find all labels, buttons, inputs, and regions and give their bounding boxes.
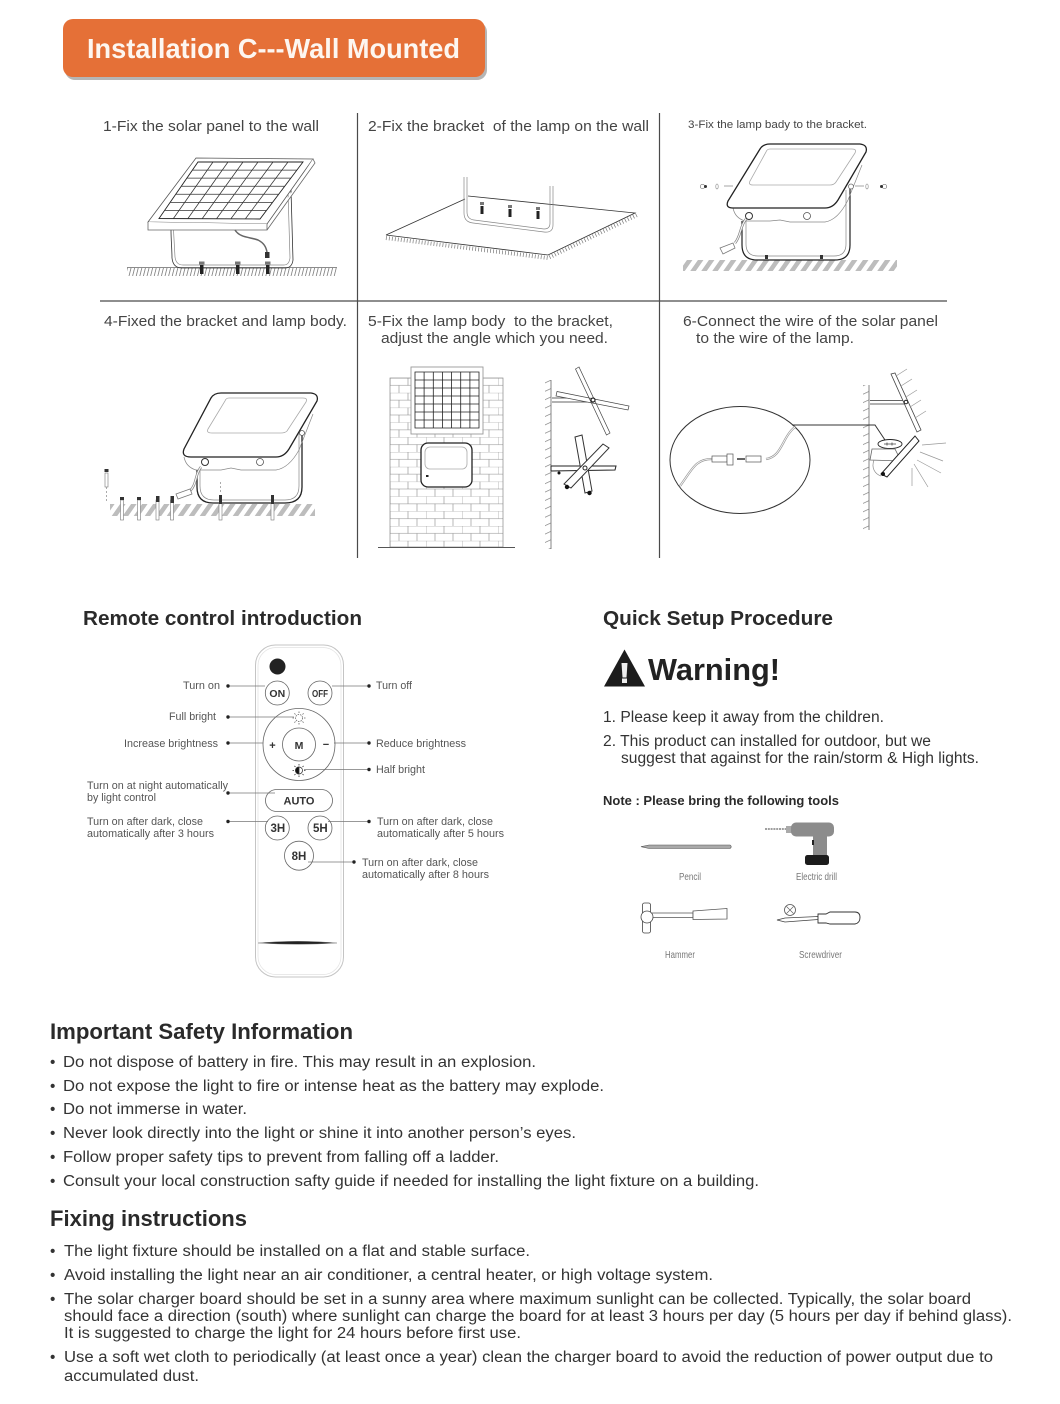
fixing list: The solar charger board should be set in a sunny area where maximum sunlight can be collected. Typically, the solar board — [64, 1291, 971, 1308]
fixing list: It is suggested to charge the light for 24 hours before first use. — [64, 1325, 521, 1342]
remote button labels: 3H — [270, 823, 285, 835]
fixing list: accumulated dust. — [64, 1368, 199, 1385]
remote button labels: + — [269, 740, 276, 752]
icon: ground surface — [127, 268, 337, 276]
remote button labels: AUTO — [284, 796, 315, 808]
safety list: Do not dispose of battery in fire. This may result in an explosion. — [63, 1054, 536, 1071]
title banner — [63, 19, 487, 80]
warning list — [603, 709, 979, 767]
safety list: Follow proper safety tips to prevent from falling off a ladder. — [63, 1149, 499, 1166]
fixing list: Avoid installing the light near an air conditioner, a central heater, or high voltage system. — [64, 1267, 713, 1284]
icon: wall plane with bracket — [386, 177, 637, 258]
remote button labels: 8H — [292, 851, 306, 863]
fixing list — [50, 1243, 1012, 1385]
remote callout labels: automatically after 3 hours — [87, 828, 214, 840]
heading: safety: Important Safety Information — [50, 1019, 353, 1044]
fixing list: • — [50, 1243, 55, 1260]
remote callout labels: Turn on after dark, close — [362, 857, 478, 869]
icon: hammer — [641, 903, 727, 961]
warning heading — [604, 650, 780, 687]
icon: hammer: Hammer — [665, 950, 696, 961]
step 2 label: 2-Fix the bracket of the lamp on the wall — [368, 118, 649, 135]
leader lines — [226, 684, 371, 864]
icon: electric drill — [765, 822, 837, 883]
step 6 label: 6-Connect the wire of the solar panel — [683, 313, 938, 330]
remote button labels: − — [323, 739, 329, 751]
remote button labels: OFF — [312, 689, 328, 700]
step 1 label: 1-Fix the solar panel to the wall — [103, 118, 319, 135]
warning list: 1. Please keep it away from the children. — [603, 709, 884, 726]
step 6 label — [683, 313, 938, 347]
remote body — [256, 645, 344, 977]
heading: remote control: Remote control introduction — [83, 607, 362, 630]
remote callout labels: Turn on after dark, close — [377, 816, 493, 828]
step 1 panel — [103, 118, 337, 276]
warning list: 2. This product can installed for outdoor, but we — [603, 733, 931, 750]
icon: side view of adjustable panel and lamp — [545, 367, 629, 549]
step 2 panel — [368, 118, 649, 258]
icon: solar panel on bracket — [148, 158, 315, 274]
safety list: • — [50, 1173, 55, 1190]
step 6 label: to the wire of the lamp. — [696, 330, 854, 347]
icon: magnified wire connector — [670, 406, 810, 514]
safety list — [50, 1054, 759, 1190]
remote callout labels: Turn on after dark, close — [87, 816, 203, 828]
warning list: suggest that against for the rain/storm & High lights. — [621, 750, 979, 767]
safety list: Do not expose the light to fire or intense heat as the battery may explode. — [63, 1078, 604, 1095]
icon: brick wall front view — [378, 367, 515, 548]
step 3 panel — [683, 119, 897, 271]
icon: screwdriver: Screwdriver — [799, 950, 843, 961]
remote button labels: ON — [269, 688, 285, 700]
heading: quick setup: Quick Setup Procedure — [603, 607, 833, 630]
remote callout labels: Turn on at night automatically — [87, 780, 229, 792]
fixing list: • — [50, 1349, 55, 1366]
remote callout labels: automatically after 8 hours — [362, 869, 489, 881]
remote callout labels: Increase brightness — [124, 738, 218, 750]
remote callout labels: automatically after 5 hours — [377, 828, 504, 840]
title banner: Installation C---Wall Mounted — [87, 33, 460, 64]
step grid dividers — [100, 113, 947, 558]
remote button labels: M — [295, 740, 304, 752]
safety list: • — [50, 1078, 55, 1095]
icon: warning triangle — [604, 650, 645, 686]
tools illustration — [641, 822, 860, 961]
step 5 label: adjust the angle which you need. — [381, 330, 608, 347]
remote callout labels: Turn on — [183, 680, 220, 692]
icon: pencil — [641, 845, 731, 883]
step 5 label: 5-Fix the lamp body to the bracket, — [368, 313, 613, 330]
icon: pencil: Pencil — [679, 872, 701, 883]
fixing list: • — [50, 1267, 55, 1284]
fixing list: • — [50, 1291, 55, 1308]
remote button labels: 5H — [313, 823, 328, 835]
safety list: • — [50, 1149, 55, 1166]
remote control diagram — [87, 645, 504, 977]
icon: full bright — [292, 712, 306, 724]
fixing list: Use a soft wet cloth to periodically (at least once a year) clean the charger board to avoid the reduction of power output due to — [64, 1349, 993, 1366]
icon: lamp body mounted to bracket — [683, 144, 897, 271]
remote callout labels: Full bright — [169, 711, 216, 723]
remote buttons — [263, 681, 335, 870]
step 5 panel — [368, 313, 629, 549]
remote callout labels: Reduce brightness — [376, 738, 466, 750]
step 5 label — [368, 313, 613, 347]
remote callout labels — [87, 680, 504, 881]
warning heading: Warning! — [648, 652, 780, 687]
fixing list: The light fixture should be installed on a flat and stable surface. — [64, 1243, 530, 1260]
icon: screwdriver — [777, 904, 860, 961]
step 3 label: 3-Fix the lamp bady to the bracket. — [688, 119, 867, 131]
remote callout labels: by light control — [87, 792, 156, 804]
remote callout labels: Turn off — [376, 680, 412, 692]
remote button labels — [269, 688, 329, 863]
safety list: Do not immerse in water. — [63, 1101, 247, 1118]
step 4 panel — [104, 313, 347, 520]
step 4 label: 4-Fixed the bracket and lamp body. — [104, 313, 347, 330]
icon: half bright — [292, 764, 306, 777]
tools note: Note : Please bring the following tools — [603, 794, 839, 808]
icon: electric drill: Electric drill — [796, 872, 837, 883]
heading: fixing: Fixing instructions — [50, 1206, 247, 1231]
safety list: Consult your local construction safty guide if needed for installing the light fixture on a building. — [63, 1173, 759, 1190]
fixing list: should face a direction (south) where sunlight can charge the board for at least 3 hours per day (5 hours per day if behind glass). — [64, 1308, 1012, 1325]
icon: side view of mounted panel and lamp — [792, 369, 946, 530]
icon: lamp and anchor bolts on surface — [104, 393, 317, 520]
safety list: • — [50, 1054, 55, 1071]
remote callout labels: Half bright — [376, 764, 425, 776]
safety list: • — [50, 1125, 55, 1142]
safety list: Never look directly into the light or shine it into another person’s eyes. — [63, 1125, 576, 1142]
safety list: • — [50, 1101, 55, 1118]
step 6 panel — [670, 313, 946, 530]
